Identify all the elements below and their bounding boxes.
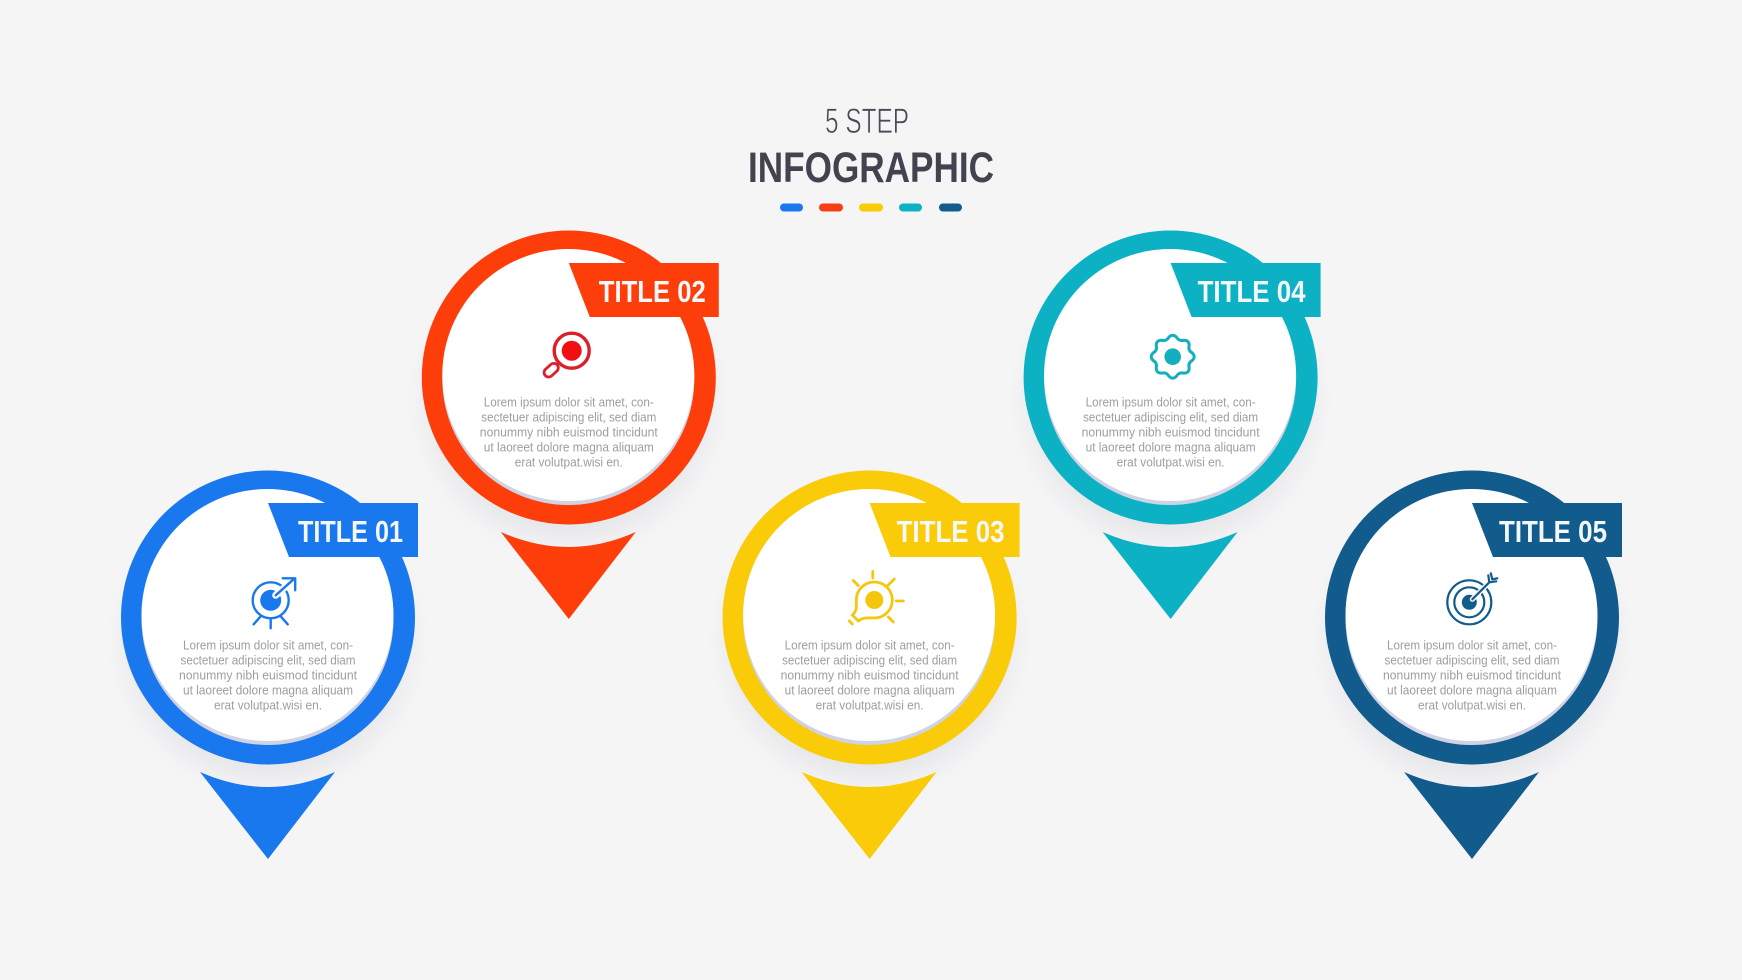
text block: sectetuer adipiscing elit, sed diam bbox=[1083, 410, 1258, 424]
title ribbon: TITLE 03 bbox=[897, 514, 1005, 549]
text block: Lorem ipsum dolor sit amet, con- bbox=[183, 637, 353, 652]
title ribbon: TITLE 02 bbox=[599, 274, 706, 309]
text block: erat volutpat.wisi en. bbox=[816, 698, 924, 712]
text block: sectetuer adipiscing elit, sed diam bbox=[481, 410, 656, 424]
disc shadow crescent bbox=[1044, 253, 1296, 505]
pin tip bbox=[802, 772, 937, 859]
white disc bbox=[142, 489, 394, 741]
title ribbon bbox=[1472, 503, 1622, 557]
title ribbon bbox=[1171, 263, 1321, 317]
text block bbox=[1383, 637, 1561, 712]
white disc bbox=[442, 249, 694, 501]
icon: bullseye with arrow bbox=[1447, 573, 1497, 624]
text block bbox=[781, 637, 959, 712]
subtitle: 5 STEP: 5 STEP bbox=[825, 102, 909, 141]
white disc bbox=[1346, 489, 1598, 741]
text block: ut laoreet dolore magna aliquam bbox=[484, 440, 654, 454]
pin tip bbox=[200, 772, 335, 859]
text block: nonummy nibh euismod tincidunt bbox=[781, 668, 959, 682]
colour dashes bbox=[780, 204, 962, 212]
text block: erat volutpat.wisi en. bbox=[1117, 454, 1225, 470]
title ribbon bbox=[268, 503, 418, 557]
text block bbox=[1082, 394, 1260, 470]
text block bbox=[179, 637, 357, 712]
title ribbon bbox=[870, 503, 1020, 557]
white disc bbox=[1044, 249, 1296, 501]
text block: Lorem ipsum dolor sit amet, con- bbox=[1387, 637, 1557, 652]
text block: nonummy nibh euismod tincidunt bbox=[179, 668, 357, 682]
white disc bbox=[743, 489, 995, 741]
text block: sectetuer adipiscing elit, sed diam bbox=[1384, 652, 1560, 668]
disc shadow crescent bbox=[743, 493, 995, 745]
panel: step 02 pin bbox=[422, 230, 719, 619]
text block: erat volutpat.wisi en. bbox=[214, 698, 322, 712]
pin ring bbox=[1325, 470, 1619, 764]
icon: magnifier bbox=[542, 333, 589, 379]
text block: sectetuer adipiscing elit, sed diam bbox=[180, 652, 356, 668]
text block: ut laoreet dolore magna aliquam bbox=[785, 682, 955, 698]
pin ring bbox=[422, 230, 716, 524]
text block: ut laoreet dolore magna aliquam bbox=[1387, 682, 1557, 698]
text block: ut laoreet dolore magna aliquam bbox=[1086, 440, 1256, 454]
icon: gear bbox=[1151, 335, 1194, 378]
text block: nonummy nibh euismod tincidunt bbox=[1383, 668, 1561, 682]
text block: erat volutpat.wisi en. bbox=[1418, 698, 1526, 712]
disc shadow crescent bbox=[1346, 493, 1598, 745]
pin tip bbox=[501, 532, 636, 619]
text block: ut laoreet dolore magna aliquam bbox=[183, 682, 353, 698]
disc shadow crescent bbox=[142, 493, 394, 745]
panel: step 01 pin bbox=[121, 470, 418, 859]
panel: step 05 pin bbox=[1325, 470, 1622, 859]
text block bbox=[480, 394, 658, 470]
text block: sectetuer adipiscing elit, sed diam bbox=[782, 652, 957, 668]
pin ring bbox=[121, 470, 415, 764]
icon: light bulb bbox=[849, 572, 903, 624]
panel: step 04 pin bbox=[1024, 230, 1321, 619]
text block: Lorem ipsum dolor sit amet, con- bbox=[484, 394, 654, 410]
title ribbon bbox=[569, 263, 719, 317]
heading: INFOGRAPHIC: INFOGRAPHIC bbox=[748, 144, 994, 192]
pin tip bbox=[1404, 772, 1539, 859]
title block bbox=[748, 102, 994, 212]
title ribbon: TITLE 04 bbox=[1198, 274, 1306, 309]
panel: step 03 pin bbox=[723, 470, 1020, 859]
text block: Lorem ipsum dolor sit amet, con- bbox=[785, 637, 955, 652]
pin ring bbox=[723, 470, 1017, 764]
pin ring bbox=[1024, 230, 1318, 524]
icon: target with arrow and legs bbox=[253, 578, 295, 628]
title ribbon: TITLE 05 bbox=[1499, 514, 1607, 549]
text block: erat volutpat.wisi en. bbox=[515, 454, 623, 470]
text block: Lorem ipsum dolor sit amet, con- bbox=[1086, 394, 1256, 410]
text block: nonummy nibh euismod tincidunt bbox=[480, 424, 658, 440]
title ribbon: TITLE 01 bbox=[298, 514, 403, 549]
pin tip bbox=[1103, 532, 1238, 619]
text block: nonummy nibh euismod tincidunt bbox=[1082, 424, 1260, 440]
disc shadow crescent bbox=[442, 253, 694, 505]
